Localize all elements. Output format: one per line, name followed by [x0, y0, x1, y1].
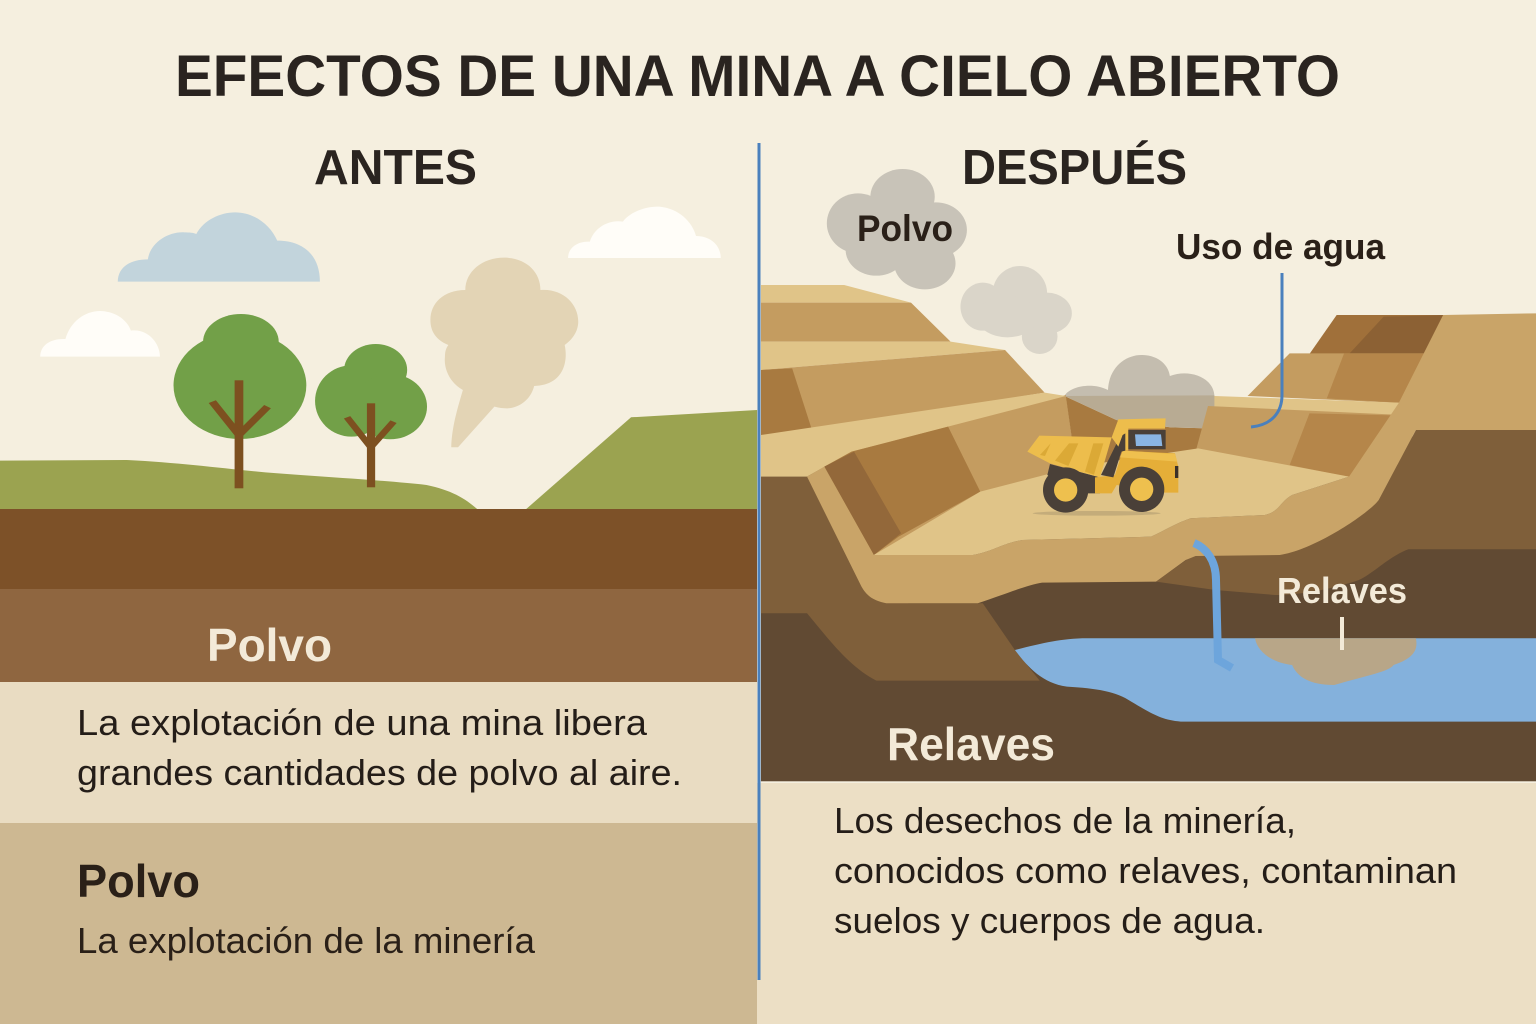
label: polvo on soil: Polvo [207, 619, 332, 671]
pit floor [874, 448, 1349, 555]
text block: polvo caption [0, 823, 757, 1024]
icon: white cloud right [568, 207, 721, 258]
open pit mine illustration [761, 285, 1536, 781]
label: uso de agua: Uso de agua [1176, 226, 1386, 267]
pit back wall [1066, 397, 1208, 473]
panel: despues [761, 141, 1536, 941]
pit left wall [761, 393, 1077, 557]
mid soil left [761, 477, 1040, 681]
panel: antes [0, 141, 757, 1024]
icon: large tree [174, 314, 306, 488]
text block: despues description: conocidos como relaves, contaminan [834, 850, 1457, 891]
icon: white cloud left [40, 311, 160, 357]
icon: dump truck [1027, 418, 1178, 516]
icon: small tree [315, 344, 427, 487]
icon: dust cloud small [960, 266, 1072, 354]
text block: despues description: suelos y cuerpos de agua. [834, 900, 1265, 941]
arrow: water discharge [1194, 543, 1232, 668]
heading: despues: DESPUÉS [962, 141, 1187, 195]
deep soil base [761, 437, 1536, 781]
dust cloud in pit [1064, 355, 1214, 397]
soil layer middle [0, 589, 757, 682]
dust clouds [827, 169, 1072, 354]
text block: antes description: La explotación de una mina libera [77, 702, 648, 743]
hill right [526, 410, 757, 509]
hill left [0, 460, 477, 509]
text block: despues description: Los desechos de la minería, [834, 800, 1296, 841]
soil layer top [0, 509, 757, 589]
icon: dust cloud large [827, 169, 967, 289]
label: relaves on tailings: Relaves [1277, 570, 1407, 611]
callout tick: relaves [1340, 617, 1344, 650]
text block: antes description: grandes cantidades de polvo al aire. [77, 752, 682, 793]
center divider [758, 143, 760, 980]
text block: despues description [834, 800, 1457, 941]
tailings in water [1255, 638, 1416, 685]
icon: dust plume [430, 258, 578, 447]
mid soil right [1156, 430, 1536, 595]
panel: despues background [757, 783, 1536, 1024]
pit rim [807, 313, 1536, 603]
top left terrace [761, 285, 1045, 437]
water body [1015, 638, 1536, 722]
heading: antes: ANTES [314, 141, 477, 195]
text block: antes description [0, 682, 757, 823]
icon: blue cloud [118, 212, 320, 282]
label: polvo: Polvo [857, 208, 953, 249]
right wall [1196, 396, 1408, 480]
text block: polvo caption: La explotación de la minería [77, 920, 536, 961]
label: relaves large: Relaves [887, 718, 1055, 770]
dust haze over back wall [1064, 395, 1215, 428]
landscape illustration [0, 207, 757, 509]
text block: polvo caption: Polvo [77, 855, 200, 907]
upper right benches [1248, 315, 1448, 403]
title: EFECTOS DE UNA MINA A CIELO ABIERTO [175, 44, 1340, 109]
arrow: water use line [1251, 273, 1282, 427]
